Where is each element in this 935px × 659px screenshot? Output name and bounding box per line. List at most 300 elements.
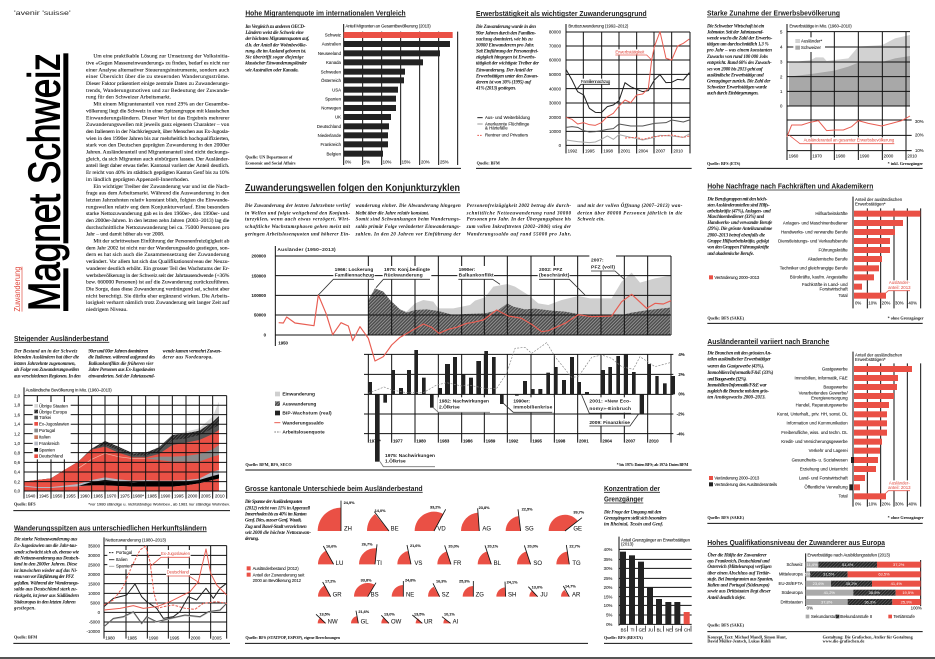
line chart: Bruttozuwanderung: 50000 xyxy=(549,72,562,77)
legend: main chart xyxy=(274,392,332,436)
kicker: Zuwanderung: Zuwanderung xyxy=(12,266,22,312)
footnote: ohne Grenzgänger: * ohne Grenzgänger xyxy=(888,316,924,321)
legend: stacked area: Deutschland xyxy=(39,454,64,459)
line chart: Nettozuwanderung: 1990 xyxy=(149,635,159,640)
text: Zuwanderungswellen: Schweiz ein. xyxy=(577,218,605,223)
area chart: Erwerbstätige: 4 xyxy=(780,45,783,50)
text: Branche: zugleich die Branche mit dem grös- xyxy=(706,389,769,394)
text: Zuwanderungswellen: zum vollen Inkrafttreten (2002–2006) stieg der xyxy=(466,225,571,230)
text: Zuwanderungswellen: derten über 80000 Personen jährlich in die xyxy=(577,211,683,216)
line chart: Nettozuwanderung: 10000 xyxy=(88,591,101,596)
stacked area chart: ausländische Bevölkerung: 1985 xyxy=(147,494,158,499)
stacked area chart: ausländische Bevölkerung: 2010 xyxy=(215,494,225,499)
wedge labels: Kantone: SH xyxy=(508,593,516,599)
wedge labels: Kantone: 25,3% xyxy=(459,579,470,583)
intro text: Dieser Faktor präsentiert einige zentrale Daten zu Zuwanderungs- xyxy=(86,81,230,87)
axis labels: main chart: 1992 xyxy=(509,438,519,443)
bar chart: Grenzgänger: 0% xyxy=(606,622,612,627)
source: stacked area: Quelle: BFS xyxy=(14,502,36,507)
text: Wanderungsspitzen: veau von vor Einführung der PFZ xyxy=(14,575,74,580)
line chart: Nettozuwanderung: 5000 xyxy=(90,601,101,606)
intro text: den Italienern in der Nachkriegszeit, über Menschen aus Ex-Jugosla- xyxy=(86,129,230,135)
legend: Kantone: Anteil der Zuwanderung seit xyxy=(253,572,305,577)
stacked area chart: ausländische Bevölkerung: 1,6 xyxy=(14,412,21,417)
bar chart: Branchen xyxy=(777,352,921,507)
bar chart: Grenzgänger: 15% xyxy=(604,594,612,599)
callout: 1966 Lockerung Familiennachzug: 1966: Lockerung xyxy=(335,267,373,273)
text: kantonale Unterschiede: Innerrhoden bis zu 40% im Kanton xyxy=(244,513,307,518)
area chart: Erwerbstätige: 20% xyxy=(915,133,924,138)
line chart: Bruttozuwanderung: 20000 xyxy=(549,115,562,120)
line chart: Bruttozuwanderung: 1998 xyxy=(603,149,614,154)
text: Wanderungsspitzen: saldo aus Deutschland stark zu- xyxy=(13,588,78,593)
axis labels: main chart: 1980 xyxy=(416,438,427,443)
text: Branche: teilen ausländischer Erwerbstätiger xyxy=(707,358,771,363)
text: Erwerbsbevölkerung: tätigen um durchschnittlich 1,3 % xyxy=(707,42,769,47)
wedge labels: Kantone: 20,1% xyxy=(487,545,499,549)
stacked bar chart: Ausbildungsstufen: Schweiz xyxy=(787,562,803,567)
wedge labels: Kantone: BE xyxy=(391,527,399,533)
wedge labels: Kantone: 23,8% xyxy=(479,506,490,510)
text: Ausländerbestand columns: 90er und 00er Jahren dominieren xyxy=(88,350,149,355)
callout: Ausländeranteil 2013 xyxy=(885,280,911,294)
area chart: Erwerbstätige: 10% xyxy=(915,148,924,153)
axis labels: main chart: 1989 xyxy=(486,438,496,443)
callout: 1990er Immobilienkrise xyxy=(503,397,554,412)
line chart: Nettozuwanderung: -10000 xyxy=(87,629,101,634)
text: Branche: Immobilien/Informatik/F&E war xyxy=(706,383,767,388)
stacked bar chart: Ausbildungsstufen: 19,5% xyxy=(902,590,914,595)
wedge labels: Kantone: 24,8% xyxy=(405,578,416,582)
text: Ausländerbestand columns: Jahre Personen aus Ex-Jugoslawien xyxy=(87,368,155,373)
text: Erwerbsbevölkerung: entspricht. Rund 60% des Zuwach- xyxy=(707,61,772,66)
text: Erwerbsbevölkerung: auch durch Einbürgerungen. xyxy=(707,92,759,97)
bar chart: Anteil Migranten xyxy=(317,24,458,165)
text: Erwerbsbevölkerung: Grenzgänger zurück. Die Zahl der xyxy=(707,79,770,84)
axis labels: main chart: 50000 xyxy=(254,313,267,318)
wedge labels: Kantone: 16,3% xyxy=(436,579,447,583)
text: Fachkräfte: von den Gruppen Führungskräfte xyxy=(707,246,770,251)
text: Qualifikationsniveau: Österreich (Mitteleuropa) verfügen xyxy=(707,564,772,570)
text: kantonale Unterschiede: derung. xyxy=(245,537,259,542)
callout: Ausländeranteil 2013 Branche xyxy=(885,480,911,494)
intro text: einer Übersicht über die zu steuernden Wanderungsströme. xyxy=(86,73,230,80)
stacked bar chart: Ausbildungsstufen: 37,8% xyxy=(821,599,833,604)
panel: Hohe Migrantenquote xyxy=(244,8,461,168)
callout: 1975 Nachwirkungen xyxy=(380,452,437,467)
bar chart: Branchen: 20% xyxy=(882,501,890,506)
text: Erwerbsbevölkerung: Schweizer Erwerbstätigen wurde xyxy=(707,85,768,90)
wedge labels: Kantone: NE xyxy=(406,593,414,599)
area chart: Erwerbstätige: 2 xyxy=(780,74,783,79)
legend: Erwerbstätigkeit xyxy=(477,115,531,138)
callout: Ex-Jugoslawien: Ex-Jugoslawien xyxy=(161,551,191,556)
bar chart: Branchen: Total xyxy=(839,494,848,499)
callout: Ausländeranteil 2013 Branche: anteil: 2013 xyxy=(888,485,911,490)
wedge labels: Kantone: 16,6% xyxy=(326,545,337,549)
legend: stacked area: Übrige Europa xyxy=(39,409,68,414)
legend: Branche: Veränderung 2000–2013 xyxy=(714,476,760,481)
text: Zuwanderungswellen: zahlen. In den 20 Jahren vor Einführung der xyxy=(355,233,461,238)
heading: Erwerbsbevölkerung: Starke Zunahme der Erwerbsbevölkerung xyxy=(707,9,840,18)
wedge labels: Kantone: VS xyxy=(414,561,422,567)
intro text: völkerung liegt die Schweiz in einer Spitzengruppe mit klassischen xyxy=(86,108,230,114)
line chart: Bruttozuwanderung: 2007 xyxy=(656,149,666,154)
bar chart: Grenzgänger: SH xyxy=(675,627,681,632)
bar chart: Grenzgänger: 40% xyxy=(604,547,612,552)
line chart: Nettozuwanderung: 0 xyxy=(98,610,101,615)
text: Erwerbsbevölkerung: wende wuchs die Zahl der Erwerbs- xyxy=(707,36,773,41)
area chart: Erwerbstätige: 1970 xyxy=(812,153,823,158)
intro text: einer Analyse alternativer Steuerungsinstrumente, sondern auch xyxy=(86,67,230,73)
callout: 1990er Balkankonflikt: 1990er: xyxy=(459,267,476,273)
intro text: losigkeit verharrt nämlich trotz Zuwanderung seit langer Zeit auf xyxy=(86,299,230,306)
text: Branche: Die Branchen mit den grössten An- xyxy=(706,352,772,357)
bar chart: Anteil Migranten: 5% xyxy=(364,160,370,165)
text: Zuwanderungswellen: Personenfreizügigkeit 2002 betrug die durch- xyxy=(467,204,571,209)
area chart: Erwerbstätige: 1990 xyxy=(860,153,870,158)
text: Fachkräfte xyxy=(706,197,773,257)
bar chart: Branchen: Energieversorgung xyxy=(811,395,848,400)
credits: Konzept xyxy=(707,634,787,644)
intro text: werbsbevölkerung in der Schweiz seit der Jahrtausendwende (+36% xyxy=(86,272,230,279)
legend: stacked area: Spanien xyxy=(39,448,55,453)
area chart: Erwerbstätige: 3 xyxy=(780,60,783,65)
bar chart: Anteil Migranten: Australien xyxy=(322,42,342,47)
text: Erwerbsbevölkerung: Zuwachs von rund 100 000 Jobs xyxy=(706,55,768,60)
legend: main chart: Einwanderung xyxy=(282,392,315,398)
line: Arbeitslosenquote xyxy=(368,343,670,393)
heading: Erwerbstätigkeit: Erwerbstätigkeit als wichtigster Zuwanderungsgrund xyxy=(476,9,647,18)
callout: 1990er Balkankonflikt: Balkankonflikt xyxy=(459,273,494,279)
source: UN Department: Quelle: UN Department of xyxy=(245,155,293,160)
bar chart: Berufsgruppen: Total xyxy=(839,293,848,298)
bar chart: Berufsgruppen: Handwerks- und verwandte Berufe xyxy=(781,229,848,234)
axis labels: main chart: -4% xyxy=(677,431,685,436)
intro text: Er reicht von 40% im städtisch geprägten Kanton Genf bis zu 10% xyxy=(86,169,230,176)
callout: 2009 Finanzkrise: 2009: Finanzkrise xyxy=(589,420,630,426)
text: kantonale Unterschiede: Die Spanne der Ausländerquoten xyxy=(244,500,303,505)
text: Zuwanderungswellen: Personen pro Jahr. In der Übergangsphase bis xyxy=(467,217,571,223)
bar chart: Grenzgänger: (2013) xyxy=(621,542,634,547)
intro text: Einwanderungsländern. Dieser Wert ist das Ergebnis mehrerer xyxy=(86,115,230,121)
text: Migrantenquote: rung, die im Ausland geboren ist. xyxy=(245,49,306,54)
axis labels: main chart: 1977 xyxy=(393,438,403,443)
intro text: Jahr – und damit höher als vor 2008. xyxy=(86,232,165,238)
bar chart: Berufsgruppen: Akademische Berufe xyxy=(808,256,848,261)
footnote: Grenzgänger: * inkl. Grenzgänger xyxy=(888,161,923,166)
legend: stacked area: Ex-Jugoslawien xyxy=(39,422,70,427)
source: SAKE: Quelle: BFS (SAKE) xyxy=(707,623,745,628)
text: Zuwanderungswellen: Die Zuwanderung der letzten Jahrzehnte verlief xyxy=(244,204,351,209)
text: Ausländerbestand columns: letzten Jahrzehnte zugenommen, xyxy=(14,362,76,367)
heading: Steigender Ausländerbestand: Steigender Ausländerbestand xyxy=(14,334,109,343)
callout: 2001 New Economy: 2001: «New Eco- xyxy=(589,399,631,405)
legend: Erwerbstätige: Ausländer* xyxy=(801,38,822,43)
wedge labels: Kantone: TI xyxy=(377,561,382,567)
text: Ausländerbestand columns xyxy=(13,350,222,379)
bar chart: Branchen: Land- und Forstwirtschaft xyxy=(799,475,848,480)
callout: 2007 PFZ voll: 2007: xyxy=(591,258,604,264)
bar chart: Branchen: Verarbeitendes Gewerbe/ xyxy=(799,390,848,395)
stacked area chart: ausländische Bevölkerung: 1960 xyxy=(80,494,90,499)
line chart: Bruttozuwanderung xyxy=(549,24,690,154)
stacked bar chart: Ausbildungsstufen: 5% xyxy=(805,572,811,577)
axis labels: main chart: 2004 xyxy=(602,438,613,443)
bar chart: Branchen: 10% xyxy=(868,501,877,506)
callout: Ausländeranteil xyxy=(789,135,895,144)
legend: Kantone: 2000 an Bevölkerung 2012 xyxy=(253,578,302,583)
text: Grenzgänger xyxy=(603,510,667,527)
wedge labels: Kantone: GE xyxy=(573,527,582,533)
stacked area chart: ausländische Bevölkerung: 2,0 xyxy=(14,393,21,398)
panel: Steigender Ausländerbestand and Wanderungsspitzen xyxy=(13,334,230,643)
callout: 2001 New Economy xyxy=(582,395,632,413)
bar chart: Branchen: Öffentliche Verwaltung xyxy=(804,485,848,490)
wedge labels: Kantone: 24,9% xyxy=(344,501,355,505)
bar chart: Anteil Migranten: Neuseeland xyxy=(318,51,342,56)
line chart: Bruttozuwanderung: 2004 xyxy=(638,149,649,154)
callout: 1990er Immobilienkrise: 1990er: xyxy=(513,399,530,405)
callout: Ausländeranteil 2013 Branche: Ausländer- xyxy=(889,480,910,485)
bar chart: Grenzgänger: 35% xyxy=(604,557,612,562)
text: Erwerbsbevölkerung: pro Jahr – was einem konstanten xyxy=(706,49,772,54)
intro text: durchschnittliche Nettozuwanderung bei ca. 75000 Personen pro xyxy=(86,225,230,231)
bar chart: Branchen: Handel, Reparaturgewerbe xyxy=(796,402,848,407)
callout: 2002 PFZ beschränkt: (beschränkt) xyxy=(539,273,570,279)
legend: main chart: Wanderungssaldo xyxy=(282,420,324,426)
source: UN Department xyxy=(245,155,296,165)
text: Fachkräfte: Handwerks- und verwandte Berufe xyxy=(706,221,773,226)
source: STATPOP: Quelle: BFS (STATPOP, ESPOP), eigene Berechnungen xyxy=(245,635,341,640)
bars: BIP-Wachstum xyxy=(368,350,675,462)
stacked area chart: ausländische Bevölkerung: 0,4 xyxy=(14,470,21,475)
legend: Erwerbstätige: Schweizer xyxy=(801,45,822,50)
stacked area chart: ausländische Bevölkerung: 0,0 xyxy=(14,489,21,494)
line chart: Bruttozuwanderung: 2001 xyxy=(621,149,631,154)
callout: 1966 Lockerung Familiennachzug xyxy=(318,266,375,295)
axis labels: main chart: 2007 xyxy=(626,438,636,443)
line chart: Nettozuwanderung: 25000 xyxy=(88,562,101,567)
heading: Hohe Migrantenquote: Hohe Migrantenquote im internationalen Vergleich xyxy=(245,8,406,17)
axis labels: main chart: 150000 xyxy=(252,273,267,278)
text: Wanderungsspitzen: ist inzwischen wieder auf das Ni- xyxy=(14,569,78,574)
line chart: Bruttozuwanderung: 30000 xyxy=(549,101,562,106)
callout: Deutschland: Deutschland xyxy=(167,569,190,574)
text: Qualifikationsniveau: stufe. Bei Immigranten aus Spanien, xyxy=(706,577,773,582)
callout: 2007 PFZ voll: PFZ (voll) xyxy=(591,264,615,270)
callout: 1975 Rückwanderung: Rückwanderung xyxy=(384,273,423,279)
legend: stacked area xyxy=(34,403,70,459)
stacked bar chart: Ausbildungsstufen: 31,5% xyxy=(823,572,835,577)
heading: Konzentration der Grenzgänger: Konzentration der xyxy=(604,484,660,493)
legend: Nettozuwanderung xyxy=(107,550,132,569)
callout: Ausländeranteil 2013: Ausländer- xyxy=(889,280,910,285)
wedge labels: Kantone: 26,7% xyxy=(362,543,373,547)
intro text xyxy=(86,54,230,313)
stacked area chart: ausländische Bevölkerung: 1965 xyxy=(93,494,104,499)
wedge labels: Kantone: LU xyxy=(336,561,343,567)
legend: main chart: Arbeitslosenquote xyxy=(282,430,325,436)
wedge labels: Kantone: AR xyxy=(572,593,581,599)
bar chart: Grenzgänger: NE xyxy=(666,627,672,632)
panel: Hohe Nachfrage nach Fachkräften xyxy=(706,182,924,323)
area chart: Erwerbstätige xyxy=(780,24,924,160)
wedge labels: Kantone: VD xyxy=(437,527,446,533)
wedge labels: Kantone: BL xyxy=(494,561,502,567)
text: Ausländerbestand columns: derer aus Nordeuropa. xyxy=(163,356,213,361)
text: Migrantenquote xyxy=(244,25,310,73)
credits: Konzept: David Müller-Jentsch, Lukas Rühli xyxy=(707,639,772,644)
text: Wanderungsspitzen xyxy=(13,538,80,612)
bar chart: Berufsgruppen: Techniker und gleichrangige Berufe xyxy=(780,266,848,271)
intro text: Ein wichtiger Treiber der Zuwanderung war und ist die Nach- xyxy=(93,184,230,190)
bar chart: Grenzgänger: GE xyxy=(639,627,645,632)
bar chart: Grenzgänger: BS xyxy=(621,627,627,632)
text: Zuwanderungswellen: schnittliche Nettozuwanderung rund 30000 xyxy=(466,211,572,216)
wedge labels: Kantone: AI xyxy=(453,619,459,625)
line: Wanderungssaldo xyxy=(279,294,671,361)
wedge labels: Kantone: SG xyxy=(525,527,534,533)
intro text: bzw. 660000 Personen) ist auf die Zuwanderung zurückzuführen. xyxy=(86,279,230,286)
text: Erwerbsbevölkerung: ausländische Erwerbstätige und xyxy=(707,73,764,78)
text: Migrantenquote: der höchsten Migrantenquoten auf, xyxy=(245,37,310,42)
text: Erwerbstätigkeit: nachzug dominiert, wie bis zu xyxy=(476,37,533,42)
wedge labels: Kantone: 21,6% xyxy=(358,610,370,614)
stacked bar chart: Ausbildungsstufen: 11,4% xyxy=(806,562,818,567)
bar chart: Branchen: Erwerbstätigen* xyxy=(855,357,886,362)
panel: Konzentration der Grenzgänger and Qualifikationsniveau xyxy=(603,484,923,644)
text: Zuwanderungswellen: und mit der vollen Öffnung (2007–2013) wan- xyxy=(577,203,683,209)
stacked bar chart: Ausbildungsstufen: EU-28/EFTA xyxy=(778,581,803,586)
line chart: Bruttozuwanderung: 40000 xyxy=(549,86,562,91)
intro text: frage aus dem Arbeitsmarkt. Während die Auswanderung in den xyxy=(86,190,230,197)
bar chart: Branchen: Gesundheits- u. Sozialwesen xyxy=(792,457,848,462)
axis labels: main chart: 1974* xyxy=(369,438,381,443)
bar chart: Berufsgruppen: Erwerbstätigen* xyxy=(855,202,886,207)
bar chart: Grenzgänger: JU xyxy=(648,627,653,632)
area chart: Erwerbstätige: 30% xyxy=(915,119,924,124)
intro text: letzten Jahrzehnten relativ konstant blieb, folgten die Einwande- xyxy=(86,196,230,203)
bar chart: Branchen: Gastgewerbe xyxy=(822,366,848,371)
stacked area chart: ausländische Bevölkerung: 1980* xyxy=(133,494,144,499)
text: Erwerbstätigkeit: Die Zuwanderung wurde in den xyxy=(475,25,536,30)
text: Erwerbstätigkeit: derern ist von 30% (1995) auf xyxy=(476,81,532,86)
text: kantonale Unterschiede xyxy=(244,500,311,542)
heading: Branche: Ausländeranteil variiert nach Branche xyxy=(707,337,829,346)
bar chart: Branchen: Kredit- und Versicherungsgewerbe xyxy=(781,439,848,444)
bar chart: Branchen: Immobilien, Informatik, F&E xyxy=(795,375,848,380)
stacked area chart: ausländische Bevölkerung: 2000 xyxy=(188,494,198,499)
text: Branche: und Baugewerbe (32%). xyxy=(707,377,747,382)
wedge labels: Kantone: ZG xyxy=(476,593,484,599)
credits: Konzept: Konzept, Text: Michael Mandl, Simon Hunt, xyxy=(707,634,787,639)
bar chart: Grenzgänger: 20% xyxy=(604,585,612,590)
stacked bar chart: Ausbildungsstufen: 0% xyxy=(807,606,813,611)
callout: 1990er Balkankonflikt xyxy=(457,266,500,284)
stacked bar chart: Ausbildungsstufen: 36,3% xyxy=(864,599,876,604)
axis labels: main chart: -2% xyxy=(677,412,685,417)
panel: Zuwanderungswellen heading and text xyxy=(244,183,683,238)
wedge labels: Kantone: 20,0% xyxy=(527,545,539,549)
text: Qualifikationsniveau: über einen Abschluss auf Tertiär- xyxy=(707,571,771,576)
legend: stacked area: Portugal xyxy=(39,428,55,433)
wedge labels: Kantone: 39,7% xyxy=(573,510,585,514)
bar chart: Berufsgruppen: Hilfsarbeitskräfte xyxy=(815,211,848,216)
text: Wanderungsspitzen: gestiegen. xyxy=(13,607,36,612)
wedge labels: Kantone: 22,5% xyxy=(522,508,533,512)
footnote: stacked area: *vor 1980 ständige u. nichtständige Wohnbev., ab 1981 nur ständige Wohnbev. xyxy=(88,502,230,507)
bar chart: Anteil Migranten: Norwegen xyxy=(321,106,342,111)
text: Ausländerbestand columns: lebenden Ausländern hat über die xyxy=(14,356,80,361)
axis labels: main chart: 1950 xyxy=(278,340,289,345)
intro text: rung für den Schweizer Arbeitsmarkt. xyxy=(86,94,172,101)
intro text: Mit der schrittweisen Einführung der Personenfreizügigkeit ab xyxy=(93,238,230,245)
line chart: Nettozuwanderung: 15000 xyxy=(88,581,101,586)
stacked bar chart: Ausbildungsstufen: 41,2% xyxy=(824,590,835,595)
callout: Ausländeranteil: Ausländeranteil an gesamter Erwerbsbevölkerung xyxy=(804,138,895,143)
text: Erwerbstätigkeit xyxy=(475,25,539,92)
text: Fachkräfte: 2000–2013 betraf ebenfalls die xyxy=(706,233,766,238)
heading: kantonale Unterschiede: Grosse kantonale Unterschiede beim Ausländerbestand xyxy=(245,484,423,493)
stacked area chart: ausländische Bevölkerung: 1940 xyxy=(26,494,36,499)
intro text: nicht berechtigt. Sie dürfte eher ergänzend wirken. Die Arbeits- xyxy=(86,292,230,299)
stacked bar chart: Ausbildungsstufen xyxy=(778,553,922,619)
wedge labels: Kantone: TG xyxy=(572,561,581,567)
bar chart: Anteil Migranten: Kanada xyxy=(326,60,342,65)
heading: Fachkräfte: Hohe Nachfrage nach Fachkräften und Akademikern xyxy=(707,182,874,191)
text: Wanderungsspitzen: Die starke Nettozuwanderung aus xyxy=(13,538,77,543)
stacked bar chart: Ausbildungsstufen: 51,4% xyxy=(842,562,854,567)
wedge labels: Kantone: 14,0% xyxy=(375,509,386,513)
bar chart: Berufsgruppen: 20% xyxy=(882,301,890,306)
intro text: trends, Wanderungsmotiven und zur Bedeutung der Zuwande- xyxy=(86,88,230,94)
bar chart: Anteil Migranten: Deutschland xyxy=(317,124,342,129)
bar chart: Branchen: 30% xyxy=(895,501,904,506)
stacked bar chart: Ausbildungsstufen: 35,2% xyxy=(846,581,857,586)
intro text: den 2000er-Jahren. In den letzten zehn Jahren (2003–2013) lag die xyxy=(86,217,230,224)
line chart: Nettozuwanderung: 1995 xyxy=(170,635,180,640)
stacked area chart: ausländische Bevölkerung: 1,8 xyxy=(14,403,21,408)
stacked area chart: ausländische Bevölkerung: 1,2 xyxy=(14,431,21,436)
line chart: Bruttozuwanderung: 80000 xyxy=(549,30,562,35)
text: Migrantenquote: Sie übertrifft sogar diejenige xyxy=(245,56,305,61)
text: Erwerbsbevölkerung: Die Schweizer Wirtschaft ist ein xyxy=(706,24,765,29)
axis labels: main chart: 100000 xyxy=(252,293,267,298)
callout: 2002 PFZ beschränkt xyxy=(538,266,585,295)
text: Zuwanderungswellen: Somit sind Schwankungen beim Wanderungs- xyxy=(356,218,461,223)
wedge labels: Kantone: 13,5% xyxy=(319,612,331,616)
stacked area chart: ausländische Bevölkerung: Ausländische Bevölkerung in Mio. (1960–2013) xyxy=(26,388,112,393)
stacked area chart: ausländische Bevölkerung: 2005 xyxy=(201,494,211,499)
intro text: wanderer deutlich erhöht. Ein grosser Teil des Wachstums der Er- xyxy=(86,266,230,272)
stacked bar chart: Ausbildungsstufen: 63,5% xyxy=(878,572,890,577)
legend: Nettozuwanderung: Italien xyxy=(116,557,128,562)
wedge labels: Kantone: 10,1% xyxy=(444,612,455,616)
area chart: Erwerbstätige: 2010 xyxy=(907,153,918,158)
intro text: starke Nettozuwanderung gab es in den 1960er-, den 1990er- und xyxy=(86,211,230,217)
callout: Deutschland xyxy=(166,569,200,583)
intro text: Um eine praktikable Lösung zur Umsetzung der Volksinitia- xyxy=(93,54,230,60)
text: Zuwanderungswellen: schaftliche Wachstumsphasen gehen meist mit xyxy=(244,225,351,230)
axis labels: main chart: 2% xyxy=(678,372,685,377)
wedge labels: Kantone: FR xyxy=(453,561,462,567)
line chart: Bruttozuwanderung: Bruttozuwanderung (1992–2012) xyxy=(568,24,629,29)
intro text: wien in den 1990er Jahren bis zur mehrheitlich hochqualifizierten, xyxy=(86,135,230,142)
bar chart: Anteil Migranten: Niederlande xyxy=(318,133,342,138)
line chart: Bruttozuwanderung: 2010 xyxy=(673,149,684,154)
callout: Erwerbstätigkeit xyxy=(615,49,652,60)
